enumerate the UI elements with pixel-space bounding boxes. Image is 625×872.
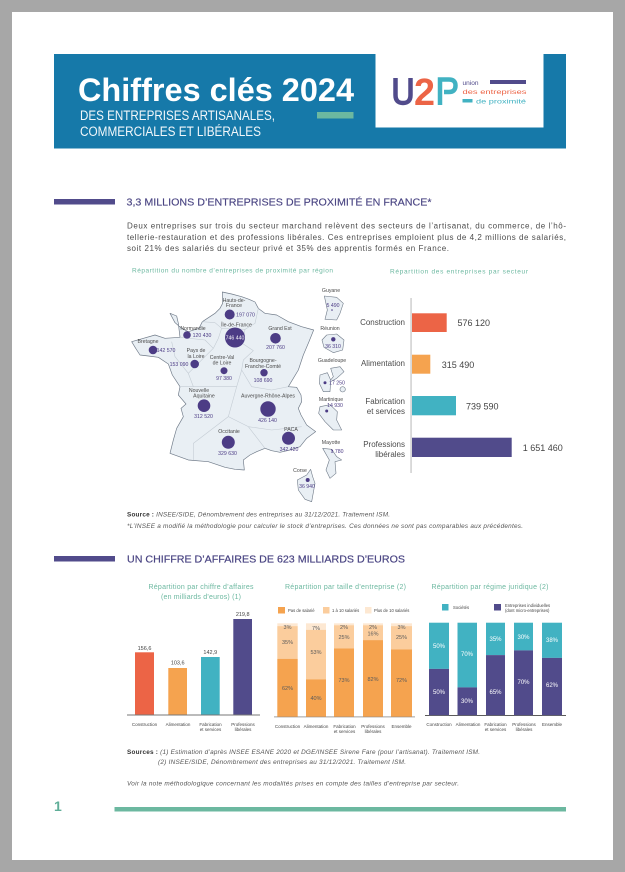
stacked bars bbox=[277, 623, 412, 717]
intro paragraph: Deux entreprises sur trois du secteur marchand relèvent des secteurs de l’artisanat, du commerce, de l’hô- bbox=[127, 222, 566, 230]
subtitle: COMMERCIALES ET LIBÉRALES bbox=[80, 124, 261, 139]
percentages: 62% bbox=[282, 686, 293, 692]
percentages: 72% bbox=[396, 678, 407, 684]
header banner bbox=[54, 54, 566, 148]
region names: PACA bbox=[284, 427, 298, 433]
region names: France bbox=[226, 303, 242, 309]
heading: sector chart: Répartition des entreprises par secteur bbox=[390, 268, 529, 276]
chart: company size: Alimentation bbox=[304, 724, 329, 729]
chart: turnover: 142,9 bbox=[203, 650, 217, 656]
region values: 5 490 bbox=[327, 303, 340, 309]
chart: legal status: Professions bbox=[512, 722, 537, 727]
percentages: 3% bbox=[398, 625, 406, 631]
chart: company size bbox=[274, 584, 415, 734]
chart: turnover: 219,8 bbox=[236, 612, 250, 618]
region names: Mayotte bbox=[322, 440, 340, 446]
title accent bar bbox=[317, 112, 354, 118]
heading: Répartition par chiffre d’affaires bbox=[148, 584, 254, 591]
region names: Guyane bbox=[322, 288, 340, 294]
chart: legal status bbox=[425, 584, 566, 732]
region values: 108 690 bbox=[254, 378, 272, 384]
region names: Auvergne-Rhône-Alpes bbox=[241, 394, 295, 400]
chart: company size: Ensemble bbox=[391, 724, 412, 729]
France outline bbox=[132, 292, 316, 470]
percentages bbox=[282, 625, 407, 702]
sources and method note: (2) INSEE/SIDE, Dénombrement des entreprises au 31/12/2021. Traitement ISM. bbox=[158, 759, 406, 766]
chart: turnover: Construction bbox=[132, 722, 158, 727]
heading: Répartition par régime juridique (2) bbox=[432, 584, 548, 591]
region values: 207 760 bbox=[266, 345, 285, 351]
percentages: 73% bbox=[338, 678, 350, 684]
region names: Bourgogne- bbox=[249, 358, 277, 364]
legend bbox=[442, 603, 550, 613]
map of France by region bbox=[132, 288, 346, 502]
chart: company size: Professions bbox=[361, 724, 386, 729]
chart: company size: libérales bbox=[365, 729, 382, 734]
sources and method note: Sources : (1) Estimation d’après INSEE ESANE 2020 et DGE/INSEE Sirene Fare (pour l’artisanat). Traitement ISM. bbox=[127, 749, 480, 756]
logo box: U2P: union bbox=[462, 80, 479, 87]
intro paragraph bbox=[127, 222, 566, 253]
chart: legal status: et services bbox=[485, 727, 507, 732]
bar: alimentation: 315 490 bbox=[442, 360, 474, 370]
bar: fabrication: 739 590 bbox=[466, 402, 499, 412]
legend: Pas de salarié bbox=[288, 608, 315, 613]
chart: turnover: Fabrication bbox=[199, 722, 222, 727]
heading: (en milliards d’euros) (1) bbox=[161, 594, 241, 601]
region values: 746 440 bbox=[226, 336, 244, 342]
region names: Occitanie bbox=[218, 429, 240, 435]
region names: de Loire bbox=[213, 360, 231, 366]
chart: turnover: 103,6 bbox=[171, 660, 185, 666]
region values: 153 090 bbox=[170, 362, 188, 368]
region values: 426 140 bbox=[258, 418, 277, 424]
region names: Grand Est bbox=[268, 326, 292, 332]
stacked bars bbox=[429, 623, 562, 715]
bar: fabrication: Fabrication bbox=[365, 397, 405, 406]
bar: construction bbox=[360, 313, 490, 332]
bar: professions bbox=[363, 438, 563, 459]
region names: Centre-Val bbox=[210, 355, 234, 361]
chart: turnover bbox=[127, 584, 260, 732]
region names: Pays de bbox=[187, 348, 205, 354]
legend: Plus de 10 salariés bbox=[374, 608, 409, 613]
sources and method note bbox=[127, 749, 480, 788]
percentages: 53% bbox=[310, 650, 322, 656]
region values: 312 520 bbox=[194, 414, 213, 420]
bar: alimentation: Alimentation bbox=[361, 359, 405, 368]
region values: 14 930 bbox=[327, 403, 343, 409]
region names: Bretagne bbox=[137, 339, 159, 345]
percentages bbox=[433, 635, 559, 705]
source note bbox=[127, 512, 523, 530]
source note: *L’INSEE a modifié la méthodologie pour calculer le stock d’entreprises. Ces données ne sont pas comparables aux précédentes. bbox=[127, 523, 523, 530]
logo box: U2P: 2 bbox=[414, 72, 435, 114]
percentages: 25% bbox=[338, 635, 350, 641]
horizontal bar chart: sectors bbox=[360, 298, 563, 473]
chart: legal status: libérales bbox=[516, 727, 533, 732]
chart: turnover: libérales bbox=[235, 727, 252, 732]
chart: turnover: Alimentation bbox=[166, 722, 191, 727]
bar: fabrication: et services bbox=[367, 407, 405, 416]
region names: Guadeloupe bbox=[318, 358, 346, 364]
legend: Sociétés bbox=[453, 605, 469, 610]
overseas territories and Corsica bbox=[297, 296, 345, 502]
bar: professions: libérales bbox=[375, 450, 405, 459]
region values: 329 630 bbox=[218, 451, 237, 457]
chart: legal status: Fabrication bbox=[484, 722, 507, 727]
region names: la Loire bbox=[187, 354, 205, 360]
region circles bbox=[149, 309, 335, 482]
bar: alimentation bbox=[361, 355, 474, 374]
percentages: 16% bbox=[367, 632, 379, 638]
source note: Source : INSEE/SIDE, Dénombrement des entreprises au 31/12/2021. Traitement ISM. bbox=[127, 512, 390, 518]
region values: 1 780 bbox=[331, 449, 344, 455]
chart: turnover: 156,6 bbox=[138, 646, 151, 652]
region names: Réunion bbox=[320, 326, 340, 332]
region names bbox=[137, 288, 346, 474]
percentages: 65% bbox=[489, 690, 502, 696]
percentages: 50% bbox=[433, 644, 446, 650]
chart: company size: Fabrication bbox=[333, 724, 356, 729]
percentages: 70% bbox=[517, 680, 530, 686]
logo box: U2P: de proximité bbox=[476, 98, 527, 106]
subtitle bbox=[80, 108, 275, 139]
intro paragraph: soit 21% des salariés du secteur privé et 35% des apprentis formés en France. bbox=[127, 244, 449, 253]
section 2 heading: UN CHIFFRE D’AFFAIRES DE 623 MILLIARDS D’EUROS bbox=[127, 554, 405, 566]
region names: Martinique bbox=[319, 397, 343, 403]
percentages: 35% bbox=[489, 637, 502, 643]
footer bar bbox=[114, 807, 566, 812]
region names: Nouvelle bbox=[189, 388, 209, 394]
chart: legal status: Alimentation bbox=[456, 722, 481, 727]
title: Chiffres clés 2024 bbox=[78, 72, 354, 108]
percentages: 38% bbox=[546, 638, 559, 644]
region values: 142 570 bbox=[157, 348, 175, 354]
percentages: 82% bbox=[367, 677, 379, 683]
sources and method note: Voir la note méthodologique concernant les modalités prises en compte des tailles d’entreprise par secteur. bbox=[127, 780, 459, 788]
region values: 120 430 bbox=[193, 333, 211, 339]
region values: 197 070 bbox=[236, 312, 255, 318]
percentages: 50% bbox=[433, 690, 446, 696]
region names: Aquitaine bbox=[193, 394, 215, 400]
chart: turnover: Professions bbox=[231, 722, 256, 727]
bar: professions: 1 651 460 bbox=[523, 443, 563, 453]
percentages: 30% bbox=[517, 635, 530, 641]
percentages: 7% bbox=[312, 626, 320, 632]
region names: Hauts-de- bbox=[223, 298, 246, 304]
logo box: U2P bbox=[376, 54, 544, 128]
legend bbox=[278, 607, 409, 614]
logo box: U2P: des entreprises bbox=[462, 89, 528, 96]
region names: Île-de-France bbox=[220, 322, 252, 328]
percentages: 2% bbox=[369, 625, 377, 631]
region values: 342 420 bbox=[280, 447, 298, 453]
bar: construction: Construction bbox=[360, 318, 405, 327]
percentages: 30% bbox=[461, 699, 474, 705]
region names: Corse bbox=[293, 468, 307, 474]
region names: Franche-Comté bbox=[245, 364, 281, 370]
chart: legal status: Ensemble bbox=[542, 722, 562, 727]
heading: map: Répartition du nombre d’entreprises de proximité par région bbox=[132, 268, 333, 274]
page number: 1 bbox=[54, 798, 62, 814]
percentages: 62% bbox=[546, 683, 559, 689]
chart: turnover: et services bbox=[200, 727, 222, 732]
heading bbox=[148, 584, 254, 601]
subtitle: DES ENTREPRISES ARTISANALES, bbox=[80, 108, 275, 123]
percentages: 35% bbox=[282, 640, 293, 646]
region values bbox=[157, 303, 345, 490]
percentages: 25% bbox=[396, 635, 407, 641]
legend: 1 à 10 salariés bbox=[332, 608, 359, 613]
percentages: 40% bbox=[310, 696, 322, 702]
region values: 17 250 bbox=[329, 380, 345, 386]
chart: legal status: Construction bbox=[426, 722, 452, 727]
region values: 97 380 bbox=[216, 376, 232, 382]
intro paragraph: tellerie-restauration et des professions libérales. Ces entreprises emploient plus de 4,2 millions de salariés, bbox=[127, 233, 566, 242]
legend: (dont micro-entreprises) bbox=[505, 608, 550, 613]
percentages: 70% bbox=[461, 652, 474, 658]
region values: 36 940 bbox=[299, 484, 315, 490]
bar: construction: 576 120 bbox=[458, 318, 490, 328]
bar: fabrication bbox=[365, 396, 499, 416]
percentages: 2% bbox=[340, 625, 348, 631]
percentages: 3% bbox=[284, 625, 292, 631]
heading: Répartition par taille d’entreprise (2) bbox=[285, 584, 406, 591]
legend: Entreprises individuelles bbox=[505, 603, 550, 608]
chart: company size: Construction bbox=[275, 724, 301, 729]
section 1 heading: 3,3 MILLIONS D’ENTREPRISES DE PROXIMITÉ EN FRANCE* bbox=[126, 196, 432, 208]
chart: company size: et services bbox=[334, 729, 356, 734]
region names: Normandie bbox=[180, 326, 206, 332]
bar: professions: Professions bbox=[363, 440, 405, 449]
region values: 36 310 bbox=[325, 344, 341, 350]
